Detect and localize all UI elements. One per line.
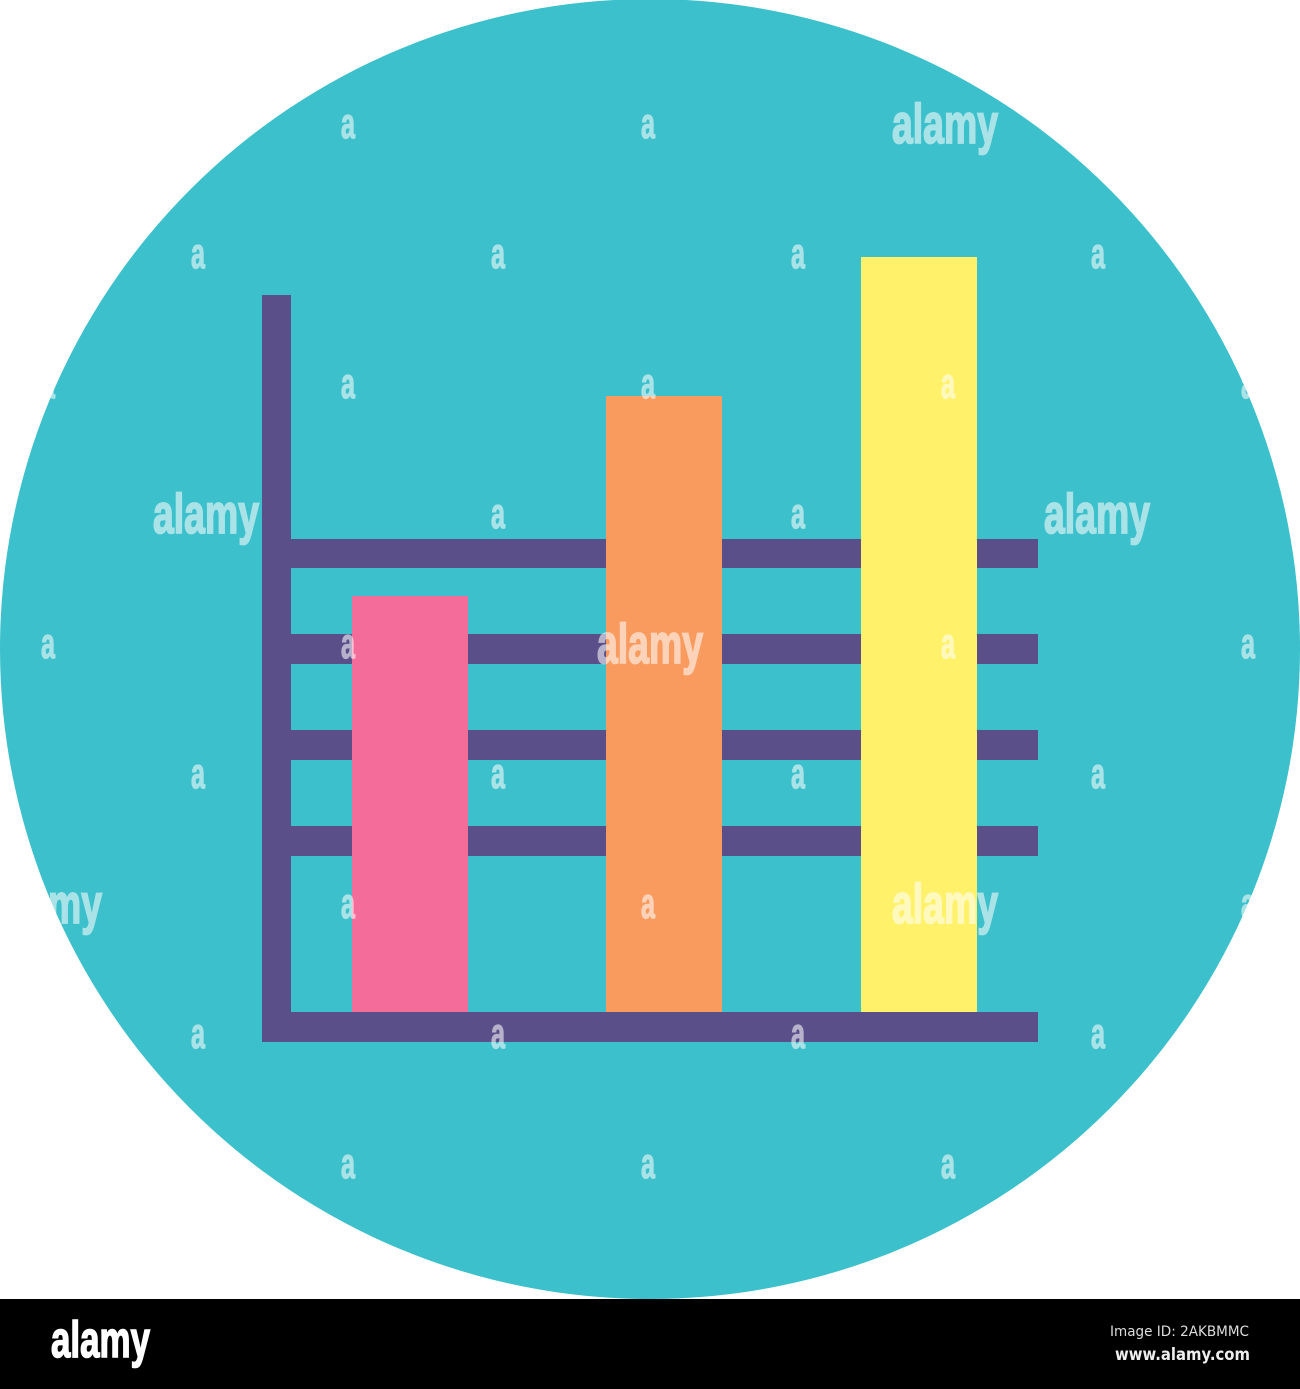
small watermark marks: a xyxy=(641,100,656,148)
small watermark marks: a xyxy=(1241,880,1256,928)
small watermark marks: a xyxy=(791,1010,806,1058)
small watermark marks: a xyxy=(1241,360,1256,408)
small watermark marks: a xyxy=(341,100,356,148)
small watermark marks: a xyxy=(491,490,506,538)
small watermark marks: a xyxy=(1091,230,1106,278)
small watermark marks xyxy=(41,100,1256,1188)
watermark lower left: my xyxy=(48,872,102,935)
small watermark marks: a xyxy=(791,490,806,538)
small watermark marks: a xyxy=(191,1010,206,1058)
y axis xyxy=(262,295,291,1042)
small watermark marks: a xyxy=(941,360,956,408)
small watermark marks: a xyxy=(191,750,206,798)
small watermark marks: a xyxy=(41,360,56,408)
small watermark marks: a xyxy=(341,880,356,928)
watermarks xyxy=(48,92,1150,935)
orange bar xyxy=(606,396,722,1013)
small watermark marks: a xyxy=(941,620,956,668)
small watermark marks: a xyxy=(641,880,656,928)
small watermark marks: a xyxy=(941,1140,956,1188)
small watermark marks: a xyxy=(491,750,506,798)
watermark lower right: alamy xyxy=(892,872,998,935)
horizontal grid lines xyxy=(290,539,1038,856)
small watermark marks: a xyxy=(491,1010,506,1058)
pink bar xyxy=(352,596,468,1013)
watermark left: alamy xyxy=(153,482,259,545)
site url: www.alamy.com xyxy=(1115,1345,1250,1365)
small watermark marks: a xyxy=(641,1140,656,1188)
alamy logo: alamy xyxy=(51,1311,150,1368)
image id: Image ID: 2AKBMMC xyxy=(1110,1324,1249,1340)
bar chart xyxy=(262,257,1038,1042)
watermark right: alamy xyxy=(1044,482,1150,545)
small watermark marks: a xyxy=(791,750,806,798)
small watermark marks: a xyxy=(341,620,356,668)
small watermark marks: a xyxy=(491,230,506,278)
small watermark marks: a xyxy=(1241,620,1256,668)
watermark top right: alamy xyxy=(892,92,998,155)
small watermark marks: a xyxy=(1091,750,1106,798)
small watermark marks: a xyxy=(341,1140,356,1188)
x axis xyxy=(262,1012,1038,1042)
small watermark marks: a xyxy=(191,230,206,278)
small watermark marks: a xyxy=(341,360,356,408)
bottom black banner xyxy=(0,1299,1300,1389)
watermark centre: alamy xyxy=(597,612,703,675)
small watermark marks: a xyxy=(41,620,56,668)
yellow bar xyxy=(861,257,977,1013)
small watermark marks: a xyxy=(641,360,656,408)
small watermark marks: a xyxy=(1091,1010,1106,1058)
small watermark marks: a xyxy=(791,230,806,278)
